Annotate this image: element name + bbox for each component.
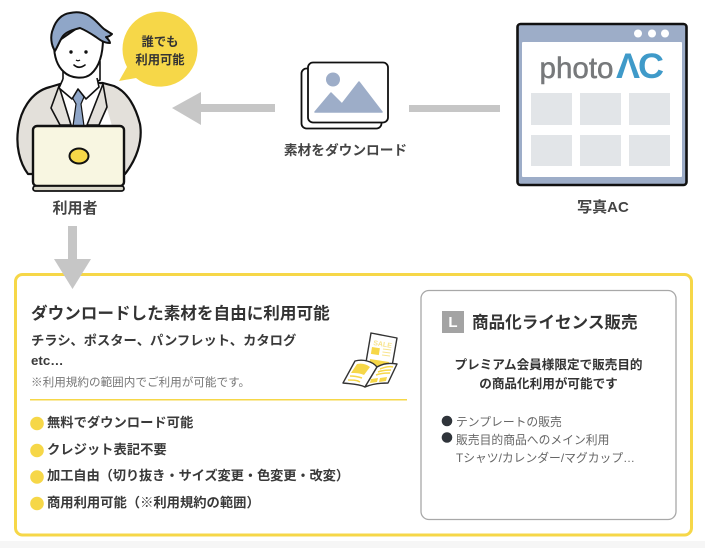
laptop bbox=[33, 126, 124, 186]
feature list bbox=[47, 415, 349, 510]
terms note: ※利用規約の範囲内でご利用が可能です。 bbox=[31, 376, 250, 389]
neck bbox=[63, 62, 100, 92]
icon: L badge bbox=[442, 311, 464, 333]
tie bbox=[72, 88, 84, 126]
shirt bbox=[60, 84, 112, 126]
speech bubble: 誰でも bbox=[142, 34, 178, 49]
license list: テンプレートの販売 bbox=[456, 415, 562, 429]
license list: 販売目的商品へのメイン利用 bbox=[456, 433, 609, 447]
feature: editing: 加工自由（切り抜き・サイズ変更・色変更・改変） bbox=[47, 468, 349, 483]
jacket bbox=[17, 83, 141, 174]
lapels bbox=[51, 84, 107, 125]
speech bubble: 利用可能 bbox=[135, 52, 185, 67]
collar bbox=[59, 78, 99, 99]
photoAC logo: photo bbox=[540, 52, 614, 85]
feature bullets bbox=[30, 417, 44, 510]
usage examples continued: etc… bbox=[31, 353, 64, 368]
image thumbnails bbox=[531, 93, 670, 166]
eyes and mouth bbox=[69, 50, 73, 54]
connector line bbox=[409, 105, 500, 112]
icon: flyer and brochure: SALE bbox=[373, 340, 393, 350]
label: photoAC: 写真AC bbox=[577, 198, 629, 216]
license description: の商品化利用が可能です bbox=[479, 376, 618, 390]
photoAC logo: Λ bbox=[616, 47, 641, 86]
laptop logo bbox=[70, 148, 88, 164]
photoAC logo: C bbox=[638, 47, 664, 86]
photoAC logo bbox=[540, 47, 664, 86]
face bbox=[54, 26, 103, 78]
usage examples: チラシ、ポスター、パンフレット、カタログ bbox=[31, 333, 296, 348]
icon: L badge: L bbox=[448, 314, 458, 331]
icon: stacked images bbox=[302, 62, 388, 128]
feature: no credit: クレジット表記不要 bbox=[47, 442, 167, 457]
panel: commercial license bbox=[421, 290, 676, 520]
icon: flyer and brochure bbox=[343, 333, 397, 387]
divider bbox=[30, 399, 407, 400]
license description: プレミアム会員様限定で販売目的 bbox=[454, 358, 643, 372]
panel heading: ダウンロードした素材を自由に利用可能 bbox=[31, 304, 330, 323]
license list: Tシャツ/カレンダー/マグカップ… bbox=[456, 451, 635, 465]
bottom background band bbox=[0, 541, 705, 548]
license list bbox=[456, 415, 635, 465]
label: user: 利用者 bbox=[52, 200, 98, 217]
window dots bbox=[634, 30, 669, 38]
label: download: 素材をダウンロード bbox=[284, 142, 407, 158]
feature: commercial: 商用利用可能（※利用規約の範囲） bbox=[47, 495, 260, 510]
arrow: download to user bbox=[172, 92, 275, 125]
license description bbox=[454, 358, 643, 390]
arrow: user to panel bbox=[54, 226, 91, 289]
icon: business person with laptop bbox=[17, 12, 141, 191]
hair bbox=[51, 12, 112, 51]
license bullets bbox=[442, 416, 452, 443]
browser window bbox=[518, 24, 686, 185]
license heading: 商品化ライセンス販売 bbox=[472, 313, 638, 332]
feature: free: 無料でダウンロード可能 bbox=[47, 415, 193, 430]
speech bubble bbox=[119, 12, 197, 87]
panel: main yellow frame bbox=[16, 274, 692, 535]
